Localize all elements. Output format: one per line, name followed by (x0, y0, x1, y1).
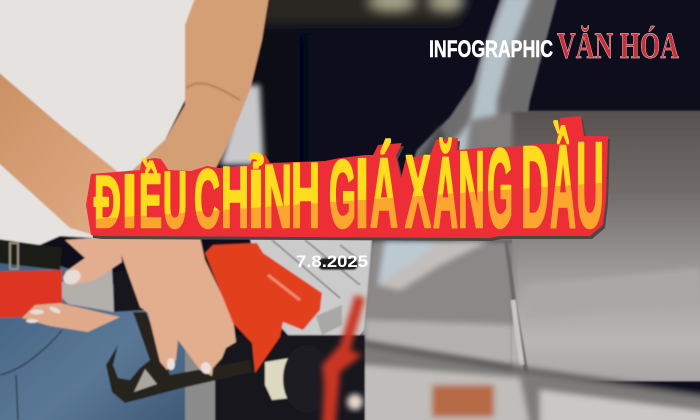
title text: Ầ (550, 120, 576, 253)
date: 7.8.2025 (296, 253, 368, 271)
car lower edge and lights (345, 342, 700, 420)
hand on nozzle (115, 237, 236, 376)
title text: Đ (94, 162, 121, 243)
white post behind arm (220, 85, 264, 165)
dark blurred garage background (255, 0, 466, 240)
belt (0, 238, 62, 270)
engine bay (250, 238, 372, 352)
red nozzle cover (205, 243, 322, 373)
title banner (86, 116, 610, 253)
title text: C (194, 152, 220, 245)
fingers holding hose (22, 236, 122, 332)
label: infographic: INFOGRAPHIC (429, 36, 553, 63)
door seam (506, 240, 540, 420)
title shadow (88, 119, 610, 241)
text: U (576, 117, 604, 253)
metal coupling (62, 268, 114, 312)
title text: Á (370, 138, 398, 248)
black trigger (106, 312, 252, 403)
left arm (0, 65, 135, 240)
car right panel (512, 111, 700, 381)
title text: N (263, 146, 292, 246)
dark lower centre (213, 335, 365, 420)
car window pillar (370, 0, 558, 240)
title text: Ỉ (248, 153, 264, 245)
title text: Ă (433, 137, 458, 249)
black nozzle handle (113, 270, 145, 312)
blurred red hose on right (322, 295, 365, 420)
title text: I (355, 138, 369, 248)
title text: H (221, 150, 249, 246)
red fuel hose (0, 270, 62, 318)
fuel filler cap (265, 305, 342, 413)
white shirt (0, 0, 204, 247)
title text: Ề (139, 159, 162, 244)
logo (429, 25, 679, 67)
title text: H (291, 145, 320, 247)
title text (94, 117, 604, 253)
title text: X (405, 134, 431, 249)
right arm (128, 0, 270, 185)
title text: G (329, 141, 356, 248)
title text: U (163, 155, 187, 244)
jeans (0, 258, 185, 420)
title text: N (458, 129, 485, 251)
title red silhouette (86, 116, 608, 238)
title text: D (521, 122, 549, 252)
title text: I (122, 159, 137, 243)
car body lower (360, 240, 700, 370)
title text: G (487, 126, 513, 251)
